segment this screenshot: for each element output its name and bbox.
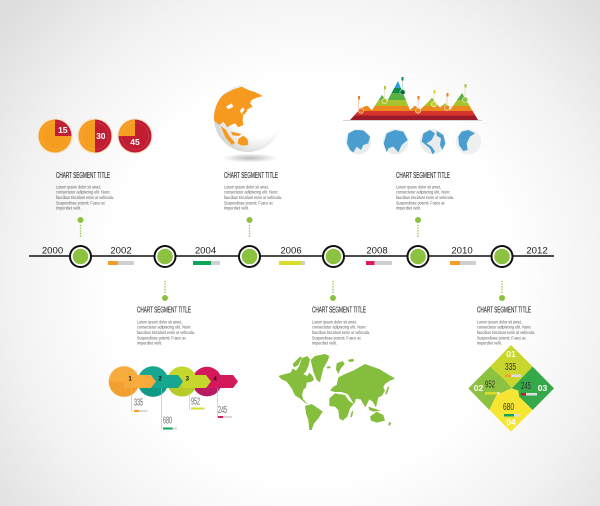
text block 2: Lorem ipsum dolor sit amet, xyxy=(224,184,269,189)
text block 3 xyxy=(396,171,454,211)
globe 2 xyxy=(383,129,408,154)
year bars xyxy=(108,261,476,265)
text block 6: Suspendisse potenti. Fusce ac xyxy=(477,335,527,340)
text block 4: CHART SEGMENT TITLE xyxy=(137,306,191,314)
callout stems xyxy=(132,388,218,429)
value: 245: 245 xyxy=(521,381,531,392)
text block 2: faucibus tincidunt enim ut vehicula. xyxy=(224,195,282,200)
text block 2 xyxy=(224,171,282,211)
text block 6: consectetur adipiscing elit. Nunc xyxy=(477,325,532,330)
text block 4 xyxy=(137,306,195,346)
text block 5 xyxy=(312,306,370,346)
segment 04 xyxy=(489,388,533,432)
text block 2: consectetur adipiscing elit. Nunc xyxy=(224,190,279,195)
text block 3: consectetur adipiscing elit. Nunc xyxy=(396,190,451,195)
canadian islands xyxy=(293,357,302,367)
year labels: 2010 xyxy=(451,246,473,256)
text block 1: consectetur adipiscing elit. Nunc xyxy=(56,190,111,195)
callout: 680: 680 xyxy=(163,416,172,426)
nodes xyxy=(70,246,512,267)
text block 4: consectetur adipiscing elit. Nunc xyxy=(137,325,192,330)
text block 2: Suspendisse potenti. Fusce ac xyxy=(224,200,274,205)
year labels xyxy=(42,246,548,256)
segment 03 xyxy=(512,367,554,410)
text block 6: faucibus tincidunt enim ut vehicula. xyxy=(477,330,535,335)
globe 4 xyxy=(456,129,481,154)
value: 680: 680 xyxy=(503,402,514,413)
text block 1: Suspendisse potenti. Fusce ac xyxy=(56,200,106,205)
greenland xyxy=(311,354,329,382)
timeline xyxy=(29,217,554,301)
step 4: 4 xyxy=(213,376,217,382)
australia xyxy=(370,412,385,423)
text block 5: Lorem ipsum dolor sit amet, xyxy=(312,319,357,324)
markers xyxy=(358,77,468,113)
callout: 245: 245 xyxy=(218,405,227,416)
text block 4: faucibus tincidunt enim ut vehicula. xyxy=(137,330,195,335)
step 1: 1 xyxy=(128,376,132,382)
step 3: 3 xyxy=(186,376,190,382)
world map xyxy=(278,354,395,430)
iceland xyxy=(327,366,331,369)
step 2: 2 xyxy=(158,376,162,382)
globe 3 xyxy=(420,129,445,154)
text block 4: Suspendisse potenti. Fusce ac xyxy=(137,335,187,340)
text block 3: faucibus tincidunt enim ut vehicula. xyxy=(396,195,454,200)
southeast asia islands xyxy=(368,407,381,412)
japan xyxy=(385,386,389,395)
diamond chart xyxy=(468,345,554,432)
scandinavia xyxy=(336,361,345,374)
text block 1: CHART SEGMENT TITLE xyxy=(56,171,110,180)
label: 04: 04 xyxy=(506,417,516,427)
year labels: 2006 xyxy=(280,246,302,256)
value: 335: 335 xyxy=(505,362,516,373)
north america xyxy=(278,356,314,405)
text block 1: imperdiet velit. xyxy=(56,206,81,211)
label: 03: 03 xyxy=(538,383,547,393)
madagascar xyxy=(350,411,353,417)
text block 5: imperdiet velit. xyxy=(312,341,337,346)
year labels: 2000 xyxy=(42,246,63,256)
text block 6: Lorem ipsum dolor sit amet, xyxy=(477,319,522,324)
globe 1 xyxy=(346,129,371,154)
text block 3: Lorem ipsum dolor sit amet, xyxy=(396,184,441,189)
text block 1: faucibus tincidunt enim ut vehicula. xyxy=(56,195,114,200)
text block 6: CHART SEGMENT TITLE xyxy=(477,306,531,314)
text block 6: imperdiet velit. xyxy=(477,341,502,346)
label: 02: 02 xyxy=(474,383,483,393)
text block 4: imperdiet velit. xyxy=(137,341,162,346)
new zealand xyxy=(388,422,391,426)
text block 2: imperdiet velit. xyxy=(224,206,249,211)
year labels: 2008 xyxy=(366,246,388,256)
mountain chart xyxy=(340,77,485,120)
pie: 15: 15 xyxy=(58,125,68,135)
text block 5: faucibus tincidunt enim ut vehicula. xyxy=(312,330,370,335)
connector dots xyxy=(78,217,505,301)
segment 01 xyxy=(490,345,533,388)
text block 5: Suspendisse potenti. Fusce ac xyxy=(312,335,362,340)
globe: orange xyxy=(214,85,276,162)
year labels: 2012 xyxy=(526,246,548,256)
callout: 335: 335 xyxy=(134,398,143,408)
text block 5: consectetur adipiscing elit. Nunc xyxy=(312,325,367,330)
text block 2: CHART SEGMENT TITLE xyxy=(224,171,278,180)
text block 6 xyxy=(477,306,535,346)
value: 952: 952 xyxy=(485,380,495,390)
text block 5: CHART SEGMENT TITLE xyxy=(312,306,366,314)
pie: 45: 45 xyxy=(130,137,140,147)
eurasia xyxy=(330,364,395,407)
text block 3: imperdiet velit. xyxy=(396,206,421,211)
pie charts xyxy=(37,118,153,154)
label: 01: 01 xyxy=(506,349,516,359)
year labels: 2004 xyxy=(195,246,217,256)
text block 3: CHART SEGMENT TITLE xyxy=(396,171,450,180)
arctic islands xyxy=(347,359,354,362)
circle arrow process chart xyxy=(109,366,238,430)
south america xyxy=(305,404,323,430)
year labels: 2002 xyxy=(110,246,132,256)
text block 1: Lorem ipsum dolor sit amet, xyxy=(56,184,101,189)
segment 02 xyxy=(468,367,512,410)
pie: 30: 30 xyxy=(96,131,106,141)
small blue globes xyxy=(346,129,481,154)
text block 3: Suspendisse potenti. Fusce ac xyxy=(396,200,446,205)
text block 4: Lorem ipsum dolor sit amet, xyxy=(137,319,182,324)
callout: 952: 952 xyxy=(191,396,200,408)
text block 1 xyxy=(56,171,114,211)
africa xyxy=(329,393,353,421)
